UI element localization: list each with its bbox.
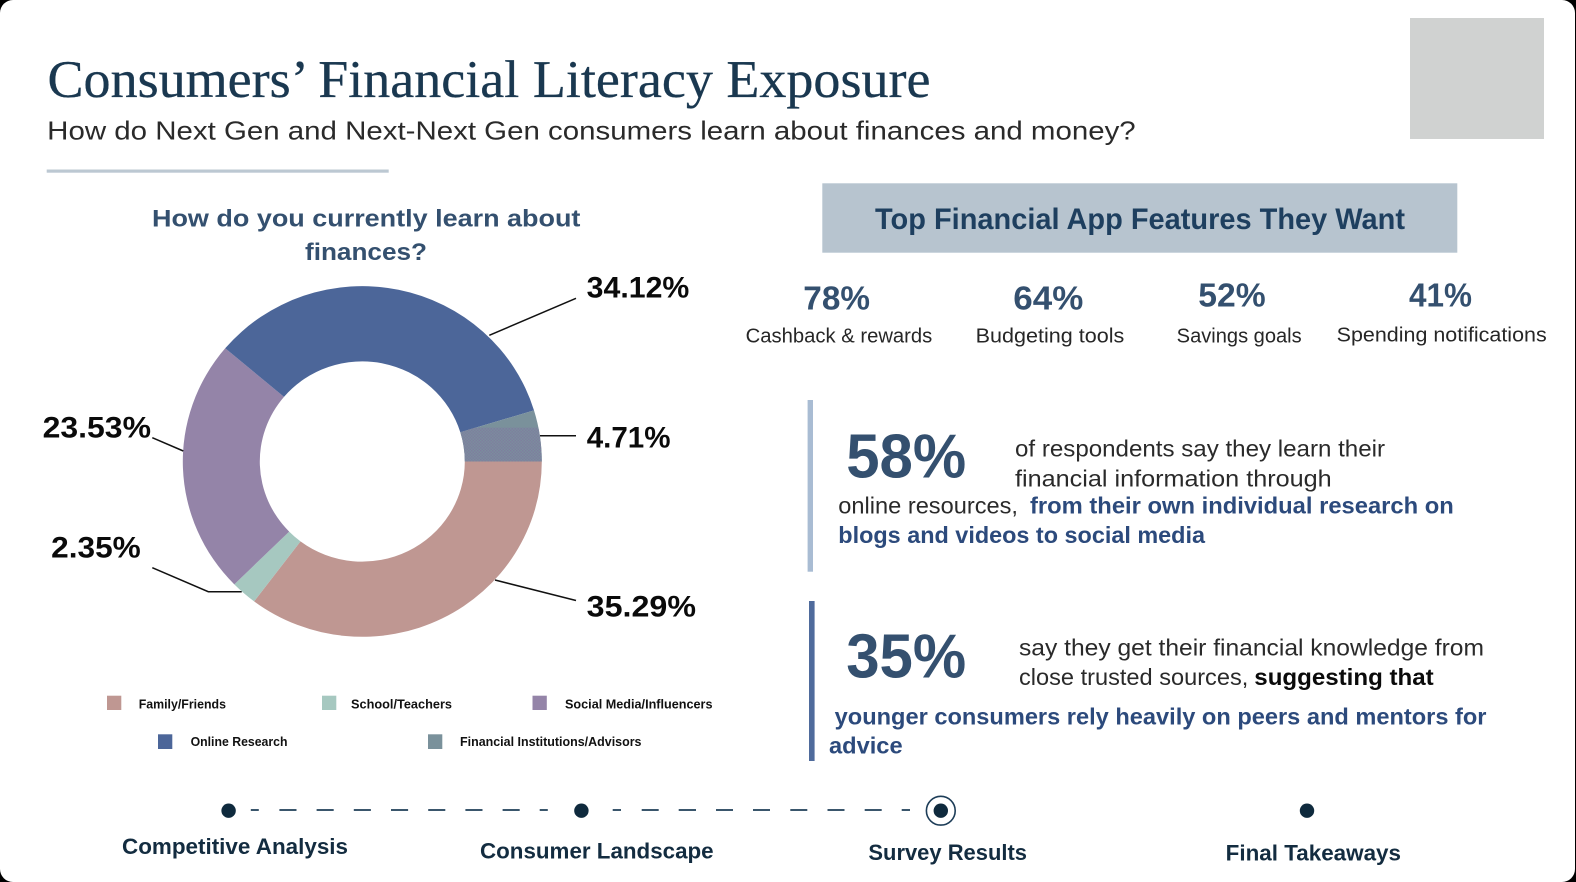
- chart heading: [152, 206, 580, 266]
- stat: cashback and rewards: [746, 280, 932, 347]
- stat: budgeting tools: Budgeting tools: [976, 325, 1124, 347]
- callout text: close trusted sources,: [1019, 664, 1248, 690]
- stat: savings goals: 52%: [1198, 276, 1266, 313]
- stat: spending notifications: Spending notifications: [1337, 325, 1547, 347]
- stat: cashback and rewards: 78%: [803, 280, 870, 317]
- subtitle: How do Next Gen and Next-Next Gen consumers learn about finances and money?: [47, 115, 1136, 145]
- slice stipple overlay: [460, 428, 542, 462]
- callout text: from their own individual research on: [1030, 492, 1454, 518]
- callout text: blogs and videos to social media: [838, 522, 1205, 548]
- stat: budgeting tools: [976, 280, 1124, 347]
- title divider: [47, 170, 389, 173]
- callout accent bar: [808, 400, 813, 572]
- stat: budgeting tools: 64%: [1013, 280, 1083, 317]
- value label 34.12%: 34.12%: [587, 272, 689, 305]
- stat: spending notifications: 41%: [1409, 276, 1472, 313]
- title: Consumers’ Financial Literacy Exposure: [48, 51, 930, 109]
- legend item: family/friends: [107, 696, 226, 712]
- value label 23.53%: 23.53%: [43, 412, 151, 444]
- timeline dashes: [251, 809, 910, 811]
- big number 35%: 35%: [846, 622, 966, 691]
- stat: savings goals: Savings goals: [1177, 325, 1302, 347]
- callout text: of respondents say they learn their: [1015, 436, 1385, 462]
- big number 58%: 58%: [846, 422, 966, 491]
- slice: school/teachers 2.35%: [234, 532, 300, 601]
- slice: online research 34.12%: [225, 286, 534, 432]
- legend item: financial institutions/advisors: Financial Institutions/Advisors: [460, 735, 642, 749]
- donut chart: [183, 286, 542, 637]
- step: survey results (current): [868, 796, 1027, 865]
- stat: spending notifications: [1337, 276, 1547, 347]
- step: survey results (current): Survey Results: [868, 840, 1027, 865]
- slice: financial institutions/advisors 4.71%: [460, 410, 542, 462]
- legend: [107, 696, 713, 749]
- legend item: social media/influencers: Social Media/Influencers: [565, 698, 713, 712]
- step: competitive analysis: Competitive Analysis: [122, 834, 348, 859]
- legend item: online research: Online Research: [191, 735, 288, 749]
- callout text: [838, 436, 1454, 548]
- stat: cashback and rewards: Cashback & rewards: [746, 325, 932, 347]
- callout text: financial information through: [1015, 465, 1332, 491]
- callout: 35 percent: [809, 601, 1487, 761]
- callout text: younger consumers rely heavily on peers and mentors for: [835, 703, 1487, 729]
- value label 35.29%: 35.29%: [587, 591, 696, 624]
- features banner: Top Financial App Features They Want: [875, 203, 1405, 236]
- callout: 58 percent: [808, 400, 1454, 572]
- value label 4.71%: 4.71%: [587, 422, 670, 454]
- features banner: [822, 183, 1457, 253]
- slice: family/friends 35.29%: [254, 462, 542, 637]
- progress timeline: [122, 796, 1401, 866]
- stat: savings goals: [1177, 276, 1302, 347]
- value label 2.35%: 2.35%: [51, 531, 141, 564]
- callout accent bar: [809, 601, 815, 761]
- image placeholder: [1410, 18, 1544, 139]
- callout text: advice: [829, 733, 903, 759]
- panel: top app features: [746, 183, 1547, 347]
- step: final takeaways: [1226, 804, 1401, 866]
- step: consumer landscape: Consumer Landscape: [480, 838, 714, 863]
- legend item: school/teachers: School/Teachers: [351, 698, 452, 712]
- chart heading: How do you currently learn about: [152, 206, 580, 233]
- slice: social media/influencers 23.53%: [183, 348, 289, 584]
- chart heading: finances?: [305, 239, 427, 266]
- callout text: suggesting that: [1254, 664, 1434, 690]
- callout text: [829, 634, 1487, 759]
- step: final takeaways: Final Takeaways: [1226, 841, 1401, 866]
- panel: donut chart section: [43, 206, 713, 749]
- legend item: school/teachers: [322, 696, 452, 712]
- leader lines: [152, 298, 576, 600]
- legend item: family/friends: Family/Friends: [139, 698, 226, 712]
- step: competitive analysis: [122, 804, 348, 859]
- callout text: online resources,: [838, 492, 1018, 518]
- callout text: say they get their financial knowledge from: [1019, 634, 1484, 660]
- step: consumer landscape: [480, 804, 714, 863]
